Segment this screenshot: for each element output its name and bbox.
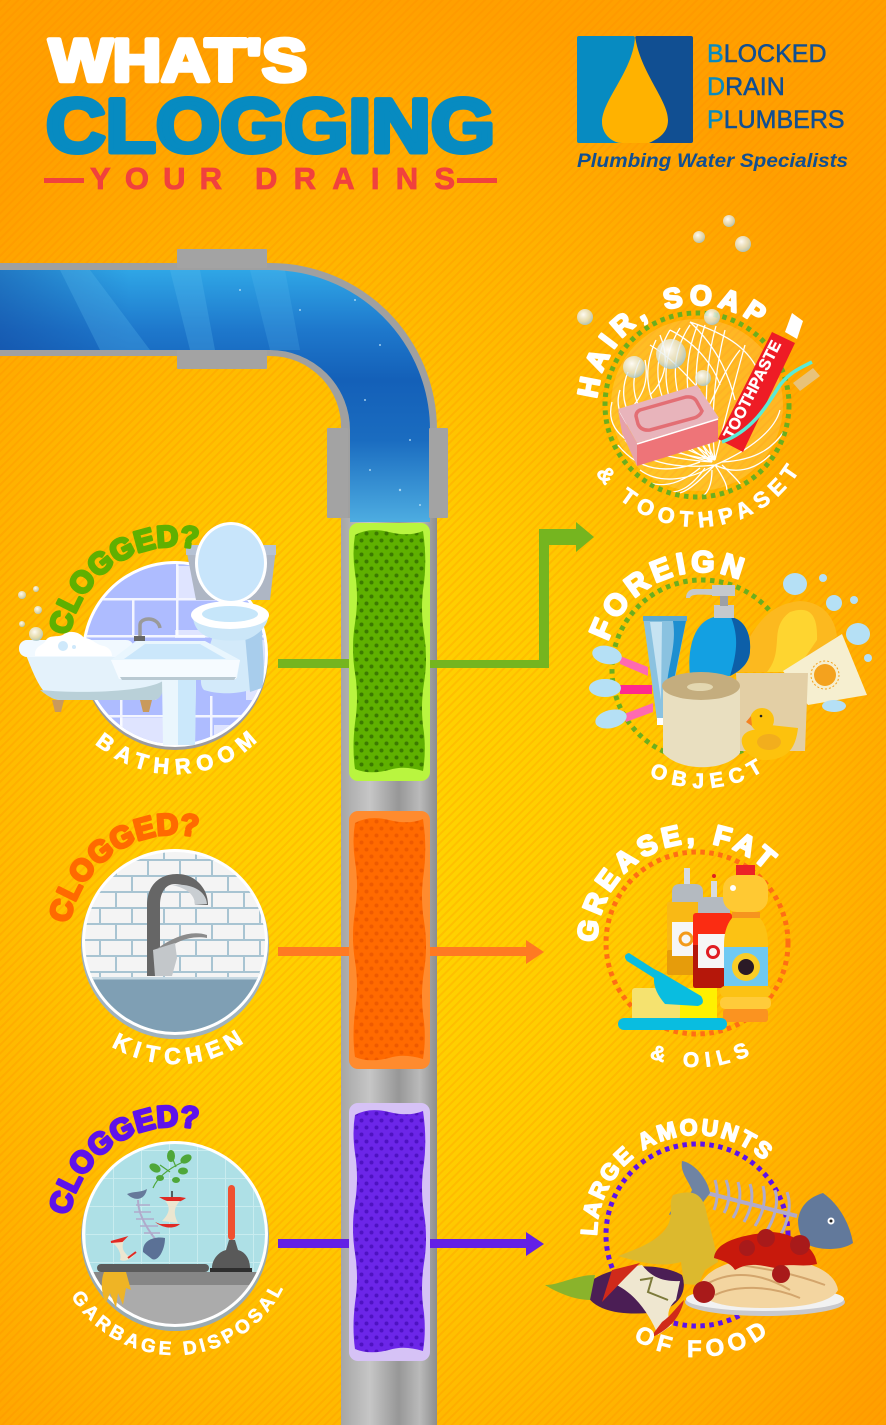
oil bottle xyxy=(720,865,771,1022)
apple core xyxy=(602,1263,684,1338)
sink xyxy=(111,619,240,745)
logo name: PLUMBERS xyxy=(707,106,845,134)
title line: what's: WHAT'S xyxy=(49,27,307,94)
clogged label: CLOGGED? xyxy=(50,1104,200,1214)
mustard bottle xyxy=(667,868,703,975)
logo name xyxy=(707,40,845,134)
soap xyxy=(618,385,719,466)
panel: hair, soap and toothpaste xyxy=(576,215,820,528)
amber blob xyxy=(732,601,837,672)
dotted ring xyxy=(606,1144,788,1326)
bubbles xyxy=(577,215,751,386)
cotton swabs xyxy=(589,643,653,732)
sun cream xyxy=(783,634,867,712)
pipe flanges xyxy=(177,249,448,518)
disposal label: GARBAGE DISPOSAL xyxy=(73,1288,284,1356)
kitchen circle xyxy=(80,848,270,1042)
bathtub xyxy=(19,632,165,712)
heading: GREASE, FAT xyxy=(577,824,779,942)
kitchen label: KITCHEN xyxy=(112,1030,244,1065)
clogged label: CLOGGED? xyxy=(50,812,200,922)
dotted ring xyxy=(606,852,788,1034)
logo xyxy=(577,36,848,172)
panel: bathroom xyxy=(18,522,276,775)
toothpaste xyxy=(718,313,803,452)
toilet xyxy=(186,522,276,693)
water pipe xyxy=(0,249,448,1425)
panel: garbage disposal xyxy=(50,1104,284,1356)
connector: green xyxy=(278,522,594,668)
logo mark: water drop xyxy=(577,36,693,143)
subheading: OF FOOD xyxy=(636,1323,765,1358)
clog: orange xyxy=(349,811,430,1069)
bubbles xyxy=(18,586,43,641)
connector: purple xyxy=(278,1232,544,1256)
logo name: DRAIN xyxy=(707,73,785,101)
panel: kitchen xyxy=(50,812,269,1065)
clog: green xyxy=(349,523,430,781)
eggplant xyxy=(545,1266,684,1314)
ketchup bottle xyxy=(693,874,732,988)
tube xyxy=(643,616,687,725)
pump bottle xyxy=(686,585,750,676)
herb xyxy=(148,1150,193,1188)
dotted ring xyxy=(612,580,792,760)
fish bone xyxy=(127,1189,165,1259)
spaghetti plate xyxy=(685,1229,845,1316)
glove xyxy=(102,1272,131,1308)
apple cores xyxy=(111,1191,186,1261)
subheading: & OILS xyxy=(650,1043,749,1068)
banana peel xyxy=(618,1192,718,1285)
subheading: & TOOTHPASET xyxy=(597,462,797,528)
rubber duck xyxy=(742,708,798,760)
heading: LARGE AMOUNTS xyxy=(580,1118,772,1236)
disposal circle xyxy=(80,1140,270,1335)
title line: your drains xyxy=(44,161,497,196)
title line: your drains: YOUR xyxy=(90,161,222,196)
title line: clogging: CLOGGING xyxy=(46,84,495,169)
faucet xyxy=(147,874,208,976)
logo name: BLOCKED xyxy=(707,40,826,68)
title line: your drains: DRAINS xyxy=(255,161,455,196)
toothbrush xyxy=(722,362,820,442)
heading: HAIR, SOAP xyxy=(576,284,766,398)
toothpaste: TOOTHPASTE xyxy=(721,338,785,442)
panel: foreign object xyxy=(588,550,872,789)
fish skeleton xyxy=(669,1161,853,1249)
butter xyxy=(618,988,727,1030)
plunger xyxy=(210,1185,252,1272)
drain strip xyxy=(97,1264,209,1272)
blue bubbles xyxy=(783,573,872,662)
connector: orange xyxy=(278,940,544,964)
heading: FOREIGN xyxy=(588,550,746,641)
bathroom label: BATHROOM xyxy=(95,730,257,775)
subheading: OBJECT xyxy=(651,758,760,789)
panel: large amounts of food xyxy=(545,1118,853,1358)
clog: purple xyxy=(349,1103,430,1361)
title xyxy=(44,27,497,196)
panel: grease, fat and oils xyxy=(577,824,790,1068)
dotted ring xyxy=(605,313,789,497)
logo tagline: Plumbing Water Specialists xyxy=(577,151,848,172)
toilet paper xyxy=(662,672,808,767)
hair strands xyxy=(611,319,785,497)
knife xyxy=(625,953,703,1006)
clogged label: CLOGGED? xyxy=(50,524,200,634)
bathroom circle xyxy=(80,560,276,751)
